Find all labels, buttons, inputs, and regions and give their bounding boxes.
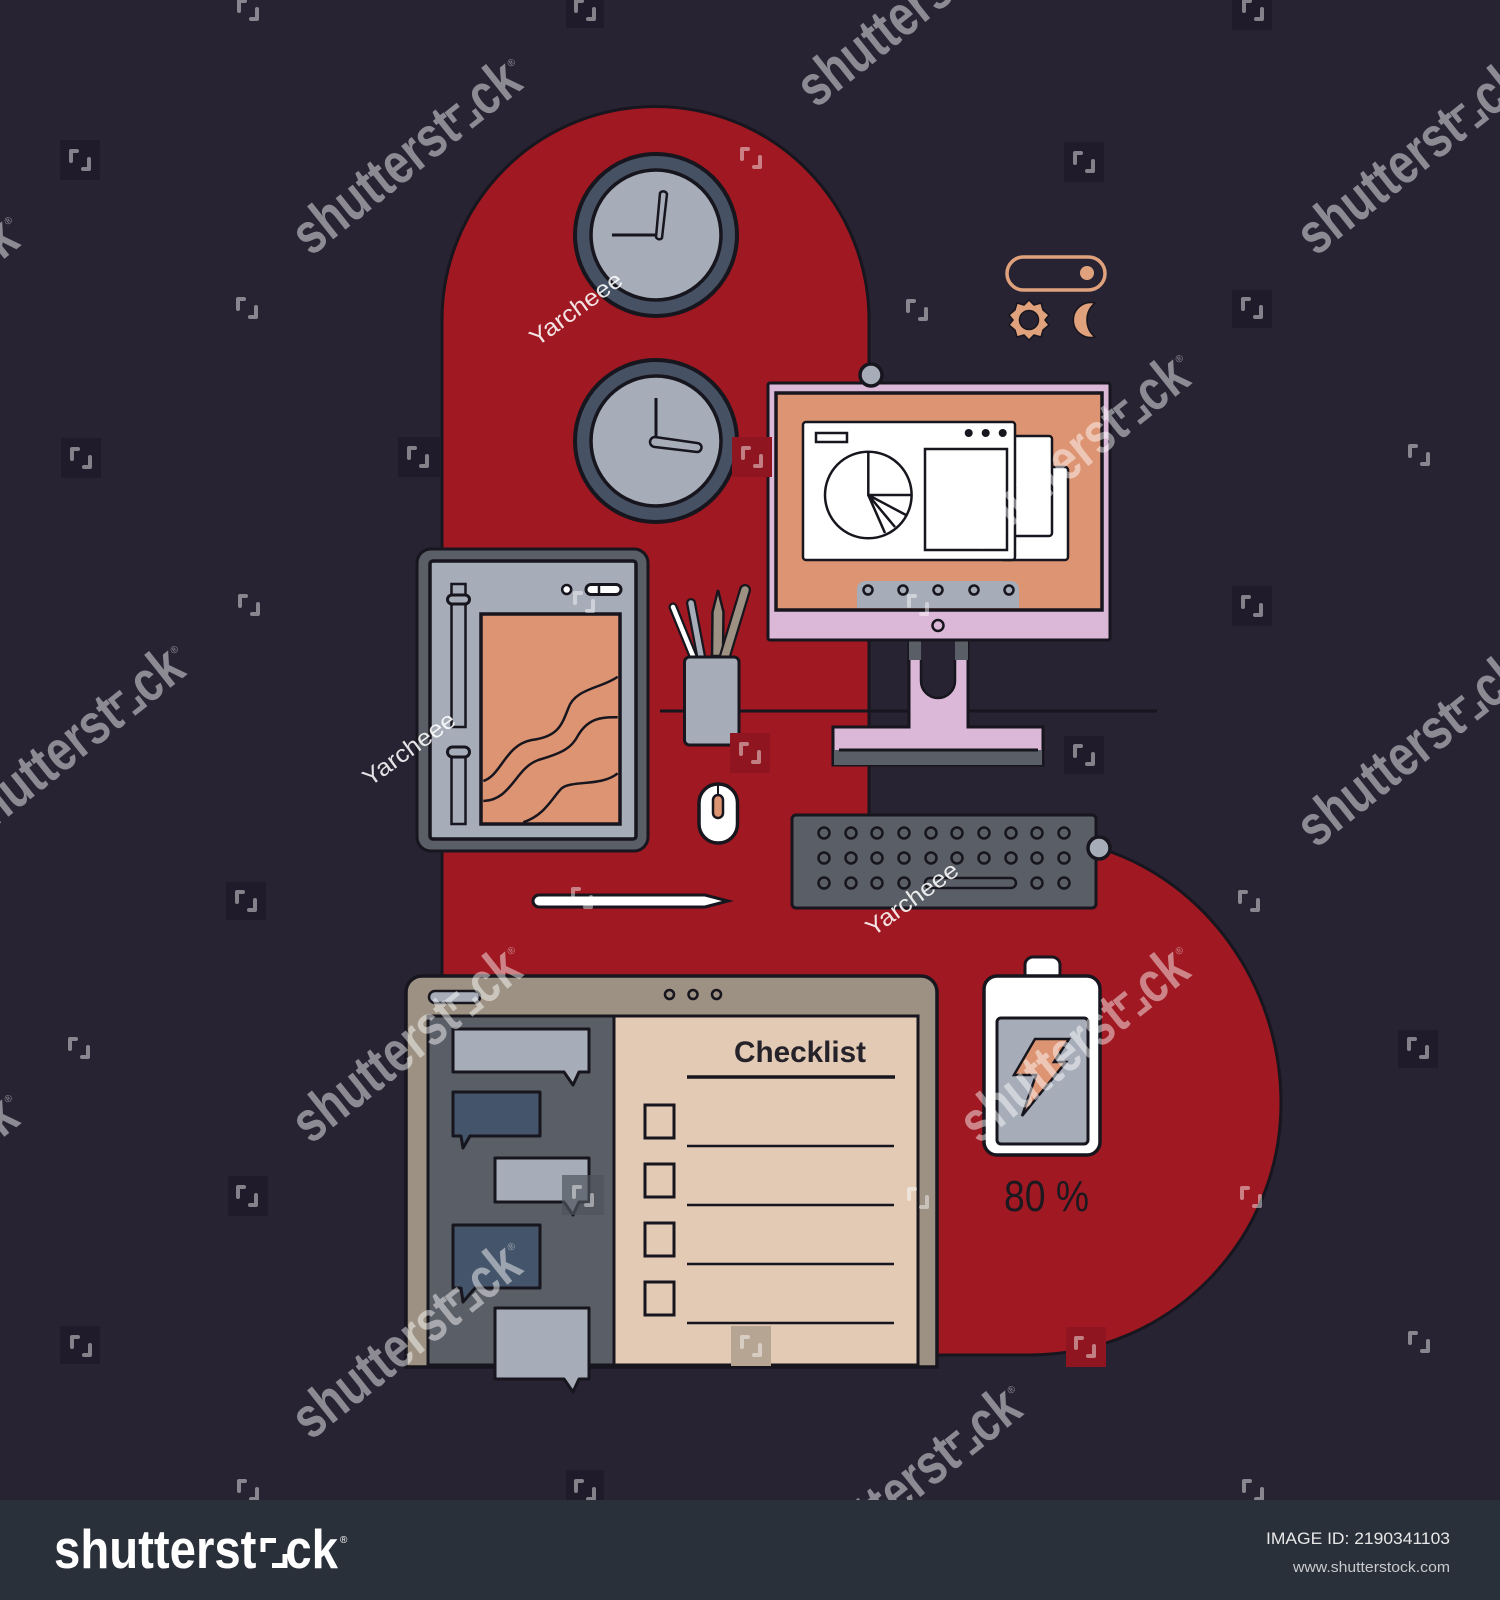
window stack (803, 422, 1068, 560)
icon: battery (984, 957, 1100, 1155)
icon: stylus pen (533, 895, 728, 907)
monitor frame (768, 383, 1110, 640)
icon: pencil cup (673, 590, 745, 745)
monitor webcam (860, 364, 882, 386)
icon: keyboard (792, 815, 1110, 908)
chat bubbles (453, 1029, 589, 1392)
checklist rows (645, 1105, 894, 1323)
footer logo: shutterstock (54, 1518, 338, 1580)
desk line (660, 710, 1157, 712)
window control dots (665, 990, 721, 999)
image id: IMAGE ID: 2190341103 (1266, 1529, 1450, 1548)
footer bar (0, 1500, 1500, 1600)
red blob backdrop (442, 106, 1281, 1355)
monitor dock (857, 581, 1019, 608)
pie chart (825, 452, 912, 538)
monitor screen (776, 393, 1102, 610)
icon: toggle with sun and moon (1007, 257, 1105, 340)
panel: checklist window (406, 976, 937, 1392)
keyboard knob (1088, 837, 1110, 859)
icon: mouse (699, 784, 738, 843)
website: www.shutterstock.com (1292, 1559, 1450, 1576)
window control pill (429, 991, 480, 1003)
icon: monitor (768, 364, 1110, 765)
chat pane (428, 1016, 614, 1365)
icon: wall clock top (575, 154, 737, 316)
watermark author names: Yarcheee (525, 267, 628, 352)
watermark author names: Yarcheee (358, 707, 461, 792)
watermark author names: Yarcheee (861, 857, 964, 942)
heading: Checklist (734, 1036, 866, 1069)
battery percentage label: 80 % (1004, 1172, 1089, 1221)
icon: wall clock bottom (575, 360, 737, 522)
watermark author names (358, 267, 964, 942)
checklist pane (614, 1016, 918, 1365)
icon: drawing tablet (417, 549, 648, 851)
footer logo: ® (340, 1535, 348, 1546)
monitor button (932, 620, 944, 631)
drawing canvas (481, 614, 620, 824)
monitor stand (833, 640, 1043, 765)
